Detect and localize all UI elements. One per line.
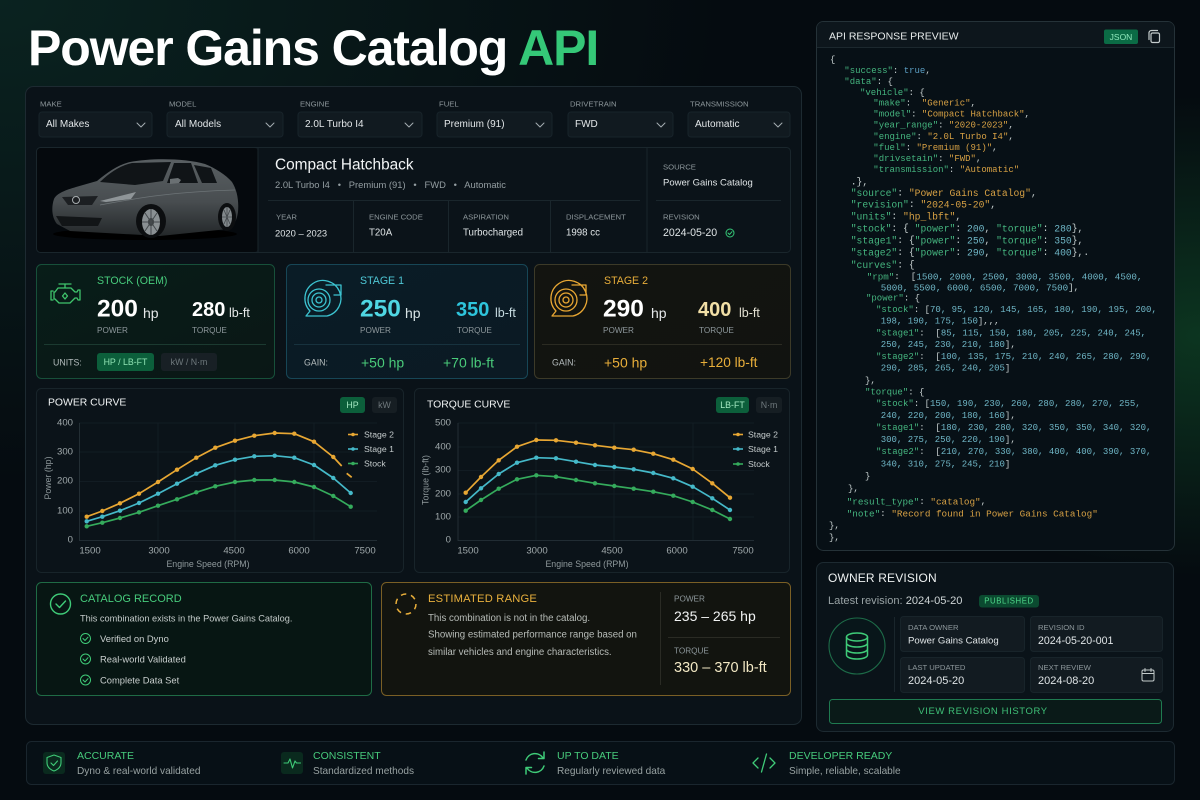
stock power: hp [143, 305, 159, 321]
stage 2 power: hp [651, 305, 667, 321]
power chart: 400 [57, 418, 73, 428]
legend: Stage 2 [364, 430, 394, 440]
curve: power stage 2 [87, 433, 352, 517]
next review: 2024-08-20 [1038, 675, 1094, 687]
estimated power: POWER [674, 594, 705, 604]
panel: stage 2 card [534, 264, 790, 378]
data owner [900, 616, 1024, 652]
power unit toggle: kW [378, 400, 392, 410]
filter row: TRANSMISSION [690, 100, 749, 108]
stage 2 power: 290 [603, 296, 644, 322]
json code block: }, [865, 376, 876, 386]
filter row: FUEL [439, 100, 459, 108]
panel: catalog explorer [26, 86, 802, 724]
json code block: { [830, 55, 835, 65]
legend: Stock [364, 458, 386, 468]
last updated: LAST UPDATED [908, 663, 966, 672]
json code block: "result_type": "catalog", [847, 496, 986, 507]
json code block: 250, 245, 230, 210, 180], [881, 340, 1016, 350]
json code block: 300, 275, 250, 220, 190], [881, 435, 1016, 445]
torque unit toggle: LB-FT [720, 400, 745, 410]
power chart: Power (hp) [43, 456, 53, 500]
filter row: Premium (91) [444, 119, 505, 130]
torque chart: Torque (lb-ft) [421, 455, 431, 505]
json code block: "torque": { [865, 387, 924, 397]
catalog checklist: Complete Data Set [100, 674, 180, 686]
consistent: CONSISTENT [313, 750, 381, 762]
icon: database [829, 618, 885, 674]
power chart [43, 418, 394, 569]
torque chart: 4500 [601, 546, 623, 556]
source and revision [663, 162, 753, 239]
source and revision: Power Gains Catalog [663, 178, 753, 188]
revision id [1030, 616, 1162, 652]
json code block: "units": "hp_lbft", [851, 211, 961, 222]
panel: stock card [36, 264, 274, 378]
estimated torque: TORQUE [674, 646, 709, 656]
json code block: "transmission": "Automatic" [873, 165, 1019, 175]
panel: stage 1 card [286, 264, 528, 378]
stock torque: lb-ft [229, 306, 250, 320]
json code block: "vehicle": { [860, 88, 925, 98]
power chart: 100 [57, 506, 73, 516]
json code block: "revision": "2024-05-20", [851, 199, 996, 210]
estimated description: similar vehicles and engine characteristics. [428, 647, 612, 658]
json code block: "make": "Generic", [873, 98, 976, 108]
legend: Stock [748, 459, 770, 469]
json code block: "engine": "2.0L Turbo I4", [873, 132, 1014, 142]
torque chart: 300 [435, 464, 451, 476]
json code block: "drivsetain": "FWD", [873, 154, 981, 164]
estimated power [674, 594, 756, 624]
latest revision: Latest revision: 2024-05-20 [828, 595, 962, 607]
curve: torque stage 2 [466, 440, 730, 498]
power unit toggle [340, 397, 397, 413]
filter row: ENGINE [300, 100, 329, 108]
json code block: "source": "Power Gains Catalog", [851, 188, 1037, 198]
filter row: 2.0L Turbo I4 [305, 119, 364, 130]
units toggle [53, 353, 217, 371]
power chart: Engine Speed (RPM) [166, 559, 250, 569]
json code block: }, [848, 484, 859, 494]
stage 2 power [603, 296, 667, 335]
filter row: DRIVETRAIN [570, 100, 617, 108]
up to date: Regularly reviewed data [557, 766, 666, 777]
json code block: "rpm": [1500, 2000, 2500, 3000, 3500, 4000, 4500, [867, 271, 1142, 282]
stage 1 power: POWER [360, 326, 391, 335]
vehicle attributes: Turbocharged [463, 228, 523, 238]
developer ready: Simple, reliable, scalable [789, 766, 901, 777]
vehicle attributes: DISPLACEMENT [566, 212, 626, 222]
stage 2 gain: +50 hp [604, 354, 647, 370]
curve: power stage 1 [87, 456, 351, 521]
stage 1 gain [304, 354, 494, 370]
power unit toggle: HP [346, 400, 359, 410]
curve: torque stage 1 [466, 458, 730, 510]
json code block: "stock": [150, 190, 230, 260, 280, 280, 270, 255, [876, 399, 1141, 409]
catalog checklist: Verified on Dyno [100, 633, 169, 644]
json code block: 240, 220, 200, 180, 160], [881, 411, 1016, 421]
json code block: "stage2": [210, 270, 330, 380, 400, 400, 390, 370, [876, 447, 1151, 457]
json code block: }, [829, 533, 840, 543]
accurate: Dyno & real-world validated [77, 766, 200, 777]
torque chart: 500 [435, 418, 451, 428]
torque unit toggle [716, 397, 782, 413]
vehicle spec line: 2.0L Turbo I4 • Premium (91) • FWD • Automatic [275, 179, 506, 190]
up to date [526, 750, 666, 777]
stage 1 torque: 350 [456, 299, 489, 321]
torque chart: 400 [435, 442, 451, 452]
power chart: 4500 [223, 546, 245, 556]
stage 2 torque: 400 [698, 299, 731, 321]
developer ready [753, 750, 901, 777]
stock torque: 280 [192, 299, 225, 321]
json code block: "note": "Record found in Power Gains Catalog" [847, 508, 1098, 519]
json code block [829, 55, 1157, 543]
torque chart: 7500 [732, 546, 754, 556]
icon: copy [1149, 30, 1160, 42]
stage 1 torque [456, 299, 516, 335]
stage 2 gain: GAIN: [552, 358, 576, 368]
filter row [39, 100, 790, 137]
stage 1 power: hp [405, 305, 421, 321]
power chart: 3000 [148, 546, 170, 556]
json badge [1104, 30, 1138, 44]
source and revision: 2024-05-20 [663, 227, 717, 239]
icon: turbo [551, 280, 587, 316]
torque chart: Engine Speed (RPM) [545, 559, 629, 569]
json code block: "fuel": "Premium (91)", [873, 143, 998, 153]
title: Power Gains Catalog API [28, 20, 598, 76]
json code block: "curves": { [851, 260, 915, 270]
stock power: 200 [97, 296, 138, 322]
stage 1 gain: +50 hp [361, 354, 404, 370]
source and revision: REVISION [663, 212, 700, 222]
torque curve heading: TORQUE CURVE [427, 400, 510, 410]
json code block: 5000, 5500, 6000, 6500, 7000, 7500], [881, 282, 1079, 293]
stage 2 torque [698, 299, 760, 335]
torque chart: 1500 [457, 546, 479, 556]
panel: owner revision [816, 562, 1174, 732]
legend: Stage 2 [748, 430, 778, 440]
filter row: All Makes [46, 119, 89, 130]
json code block: "stage1": [180, 230, 280, 320, 350, 350, 340, 320, [876, 423, 1151, 433]
stage 2 torque: TORQUE [699, 326, 734, 335]
catalog description: This combination exists in the Power Gains Catalog. [80, 614, 292, 624]
stock torque: TORQUE [192, 326, 227, 335]
json code block: "stage1": [85, 115, 150, 180, 205, 225, 240, 245, [876, 328, 1146, 338]
power chart: 200 [57, 476, 73, 486]
icon: turbo [305, 280, 341, 316]
json code block: }, [829, 521, 840, 531]
stage 2 heading: STAGE 2 [604, 275, 648, 287]
accurate [43, 750, 200, 777]
power chart: 300 [57, 446, 73, 458]
stage 2 gain [552, 354, 758, 370]
estimated torque [674, 646, 767, 676]
filter row: MAKE [40, 100, 62, 108]
stage 1 heading: STAGE 1 [360, 275, 404, 287]
view revision history button [830, 700, 1162, 724]
json code block: "data": { [844, 77, 893, 87]
torque unit toggle: N·m [761, 400, 777, 410]
icon: car [52, 159, 238, 240]
vehicle attributes: ASPIRATION [463, 212, 509, 222]
data owner: DATA OWNER [908, 623, 959, 632]
stock power: POWER [97, 326, 128, 335]
view revision history button: VIEW REVISION HISTORY [918, 706, 1048, 717]
next review [1030, 658, 1162, 692]
json code block: "stock": { "power": 200, "torque": 280}, [851, 223, 1083, 234]
stage 2 torque: lb-ft [739, 306, 760, 320]
stage 1 gain: GAIN: [304, 358, 328, 368]
curve: power stock [87, 480, 351, 526]
data owner: Power Gains Catalog [908, 636, 999, 646]
estimated description [428, 613, 637, 658]
stage 1 power: 250 [360, 296, 401, 322]
filter row: Automatic [695, 119, 739, 130]
source and revision: SOURCE [663, 162, 696, 172]
stage 2 power: POWER [603, 326, 634, 335]
published badge [979, 595, 1039, 608]
revision id: REVISION ID [1038, 623, 1085, 632]
json code block: .}, [851, 176, 868, 188]
vehicle attributes: YEAR [276, 212, 297, 222]
icon: check circle [50, 594, 70, 614]
json code block: "stock": [70, 95, 120, 145, 165, 180, 190, 195, 200, [876, 305, 1157, 315]
json code block: "power": { [866, 294, 920, 304]
estimated heading: ESTIMATED RANGE [428, 593, 537, 605]
legend: Stage 1 [364, 444, 394, 454]
legend [733, 430, 778, 469]
json code block: "stage2": {"power": 290, "torque": 400},. [851, 247, 1089, 258]
up to date: UP TO DATE [557, 750, 619, 762]
legend: Stage 1 [748, 444, 778, 454]
consistent [281, 750, 414, 777]
stage 1 power [360, 296, 421, 335]
json code block: 340, 310, 275, 245, 210] [881, 460, 1010, 470]
json code block: 290, 285, 265, 240, 205] [881, 364, 1010, 374]
catalog checklist: Real-world Validated [100, 654, 186, 664]
catalog checklist [80, 633, 186, 686]
stock power [97, 296, 159, 335]
torque chart: 200 [435, 488, 451, 500]
icon: dashed circle [396, 594, 416, 614]
developer ready: DEVELOPER READY [789, 750, 892, 762]
panel: estimated range [382, 582, 790, 696]
vehicle card [36, 148, 790, 252]
filter row: FWD [575, 119, 598, 130]
json code block: "stage1": {"power": 250, "torque": 350}, [851, 235, 1083, 246]
json code block: } [865, 472, 870, 482]
last updated [900, 658, 1024, 692]
units toggle: UNITS: [53, 358, 82, 368]
json badge: JSON [1110, 32, 1132, 42]
accurate: ACCURATE [77, 750, 134, 762]
vehicle attributes: 1998 cc [566, 228, 600, 238]
panel: catalog record [36, 582, 372, 696]
torque chart: 6000 [666, 546, 688, 556]
vehicle attributes: 2020 – 2023 [275, 228, 327, 238]
units toggle: HP / LB-FT [104, 357, 148, 367]
stage 1 torque: TORQUE [457, 326, 492, 335]
power chart: 1500 [79, 546, 101, 556]
estimated power: 235 – 265 hp [674, 608, 756, 624]
json code block: "model": "Compact Hatchback", [873, 110, 1030, 120]
legend [348, 430, 394, 468]
consistent: Standardized methods [313, 766, 414, 777]
torque chart: 0 [446, 534, 451, 546]
stock torque [192, 299, 250, 335]
filter row: MODEL [169, 100, 197, 108]
catalog heading: CATALOG RECORD [80, 593, 182, 605]
json code block: "success": true, [844, 66, 931, 76]
filter row: All Models [175, 119, 221, 130]
revision id: 2024-05-20-001 [1038, 635, 1114, 647]
power curve heading: POWER CURVE [48, 398, 126, 408]
vehicle attributes [275, 212, 626, 238]
json code block: 198, 190, 175, 150],,, [881, 317, 1000, 327]
stage 1 torque: lb-ft [495, 306, 516, 320]
stage 2 gain: +120 lb-ft [700, 355, 758, 370]
panel: torque curve [414, 388, 790, 572]
vehicle attributes: ENGINE CODE [369, 212, 423, 222]
torque chart: 3000 [526, 546, 548, 556]
owner heading: OWNER REVISION [828, 571, 937, 585]
api panel heading: API RESPONSE PREVIEW [829, 30, 959, 42]
power chart: 0 [68, 534, 73, 546]
stage 1 gain: +70 lb-ft [443, 354, 494, 370]
power chart: 6000 [288, 546, 310, 556]
footer strip [26, 742, 1174, 784]
panel: power curve [36, 388, 404, 572]
curve: torque stock [466, 475, 730, 519]
last updated: 2024-05-20 [908, 675, 964, 687]
panel: API response preview [816, 22, 1174, 550]
torque chart: 100 [435, 512, 451, 522]
vehicle name: Compact Hatchback [275, 156, 414, 174]
icon: engine [51, 284, 80, 303]
next review: NEXT REVIEW [1038, 663, 1092, 672]
estimated torque: 330 – 370 lb-ft [674, 660, 767, 676]
stock heading: STOCK (OEM) [97, 275, 167, 287]
json code block: "stage2": [100, 135, 175, 210, 240, 265, 280, 290, [876, 352, 1151, 362]
estimated description: Showing estimated performance range based on [428, 630, 637, 640]
torque chart [421, 418, 778, 569]
estimated description: This combination is not in the catalog. [428, 613, 590, 624]
vehicle attributes: T20A [369, 228, 393, 238]
power chart: 7500 [354, 546, 376, 556]
published badge: PUBLISHED [984, 596, 1034, 606]
units toggle: kW / N·m [171, 357, 207, 367]
json code block: "year_range": "2020-2023", [873, 120, 1014, 130]
